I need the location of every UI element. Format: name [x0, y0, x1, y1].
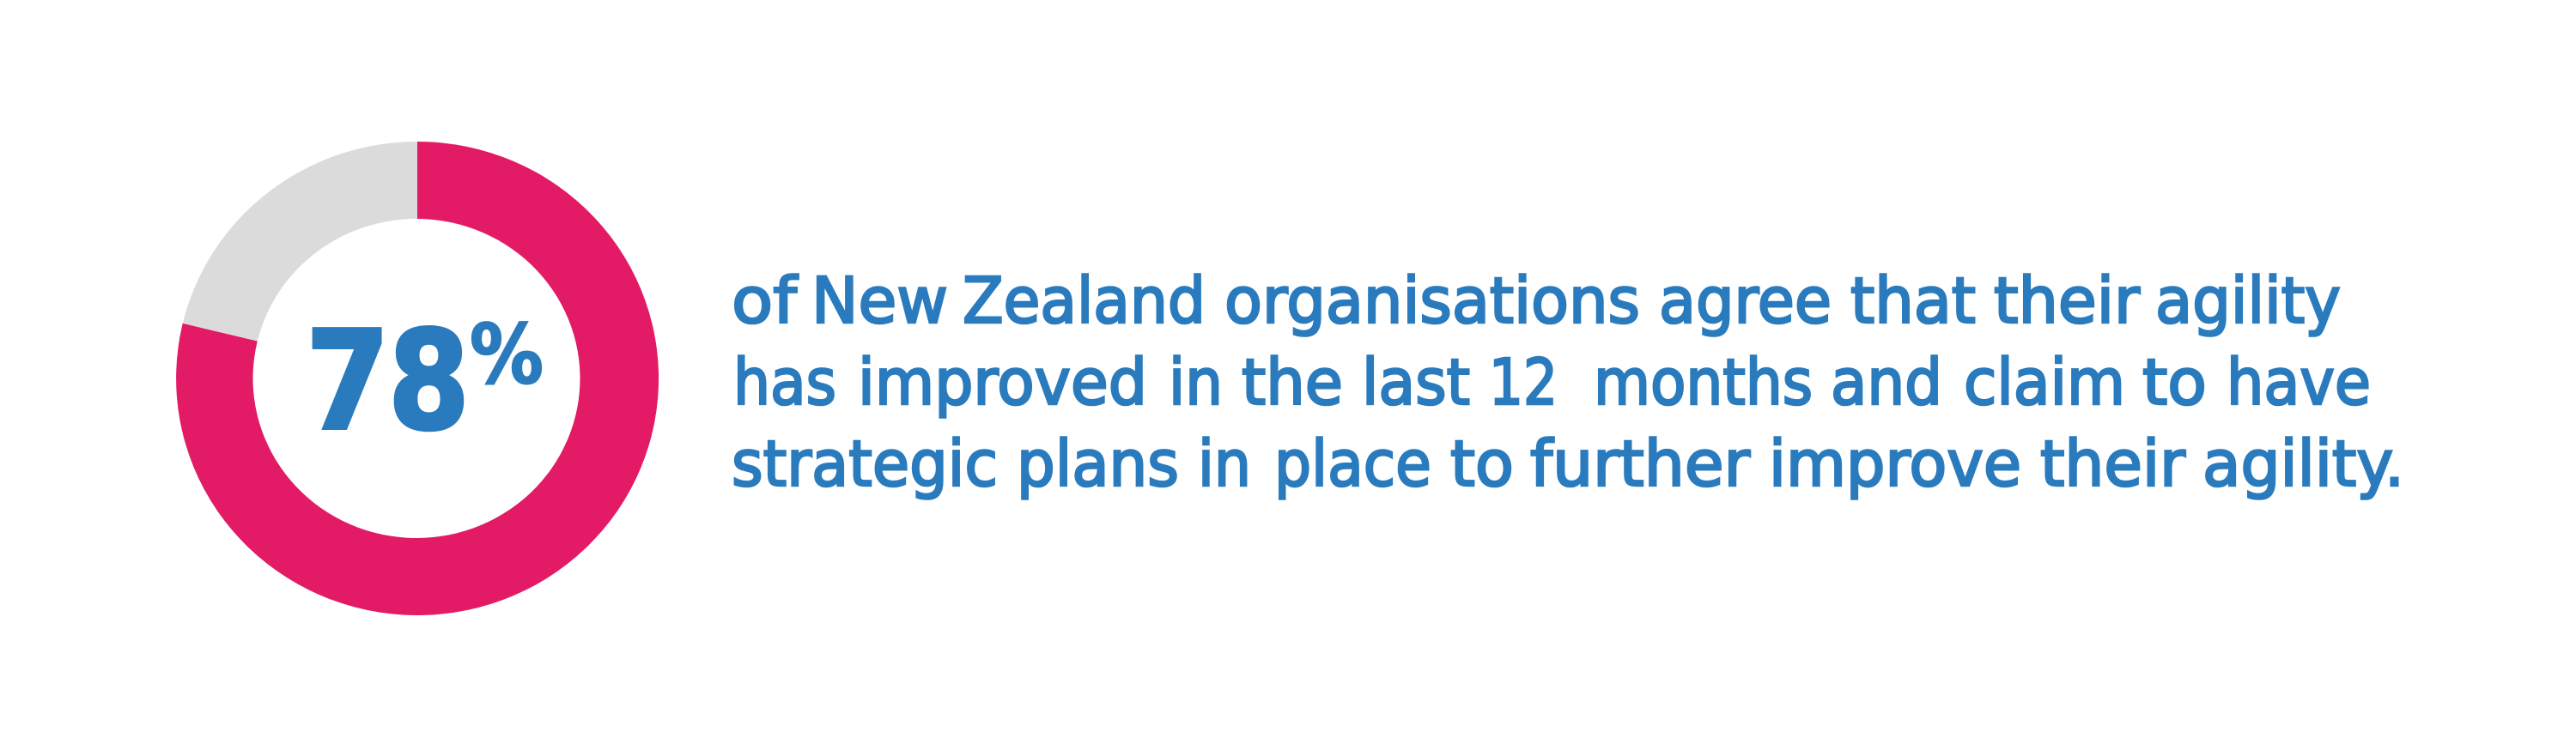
donut segment: 78% pink [176, 142, 659, 615]
text line 2: months [1594, 346, 1813, 420]
text line 2: have [2227, 346, 2371, 420]
big number 7 and 8: 8 [388, 302, 470, 461]
text line 1: their [1994, 264, 2141, 338]
text line 3: place [1274, 427, 1431, 501]
text line 3: their [2040, 427, 2186, 501]
text line 2: improved [858, 346, 1147, 420]
text line 1: agility [2155, 264, 2341, 338]
text line 1: organisations [1224, 264, 1640, 338]
text line 3: to [1450, 427, 1514, 501]
text line 1: agree [1659, 264, 1832, 338]
text line 3: plans [1017, 427, 1179, 501]
text line 3: improve [1769, 427, 2021, 501]
text line 1: that [1850, 264, 1976, 338]
text line 2: the [1242, 346, 1343, 420]
text line 2: and [1831, 346, 1942, 420]
percent sign: % [470, 308, 544, 402]
text line 2: in [1169, 346, 1223, 420]
text line 1: Zealand [963, 264, 1206, 338]
text line 2: to [2142, 346, 2207, 420]
donut segment: 22% grey [183, 142, 417, 342]
text line 3: agility. [2202, 427, 2404, 501]
text line 3: strategic [732, 427, 998, 501]
donut chart with 78% label [176, 142, 659, 615]
text line 2: 12 [1489, 346, 1558, 420]
text line 1: of [732, 264, 799, 338]
text line 2: last [1362, 346, 1470, 420]
big number 7 and 8: 7 [306, 302, 390, 461]
text line 1: New [811, 264, 948, 338]
text line 2: has [733, 346, 836, 420]
statement text [732, 264, 2404, 501]
text line 2: claim [1964, 346, 2125, 420]
text line 3: in [1198, 427, 1251, 501]
text line 3: further [1530, 427, 1751, 501]
